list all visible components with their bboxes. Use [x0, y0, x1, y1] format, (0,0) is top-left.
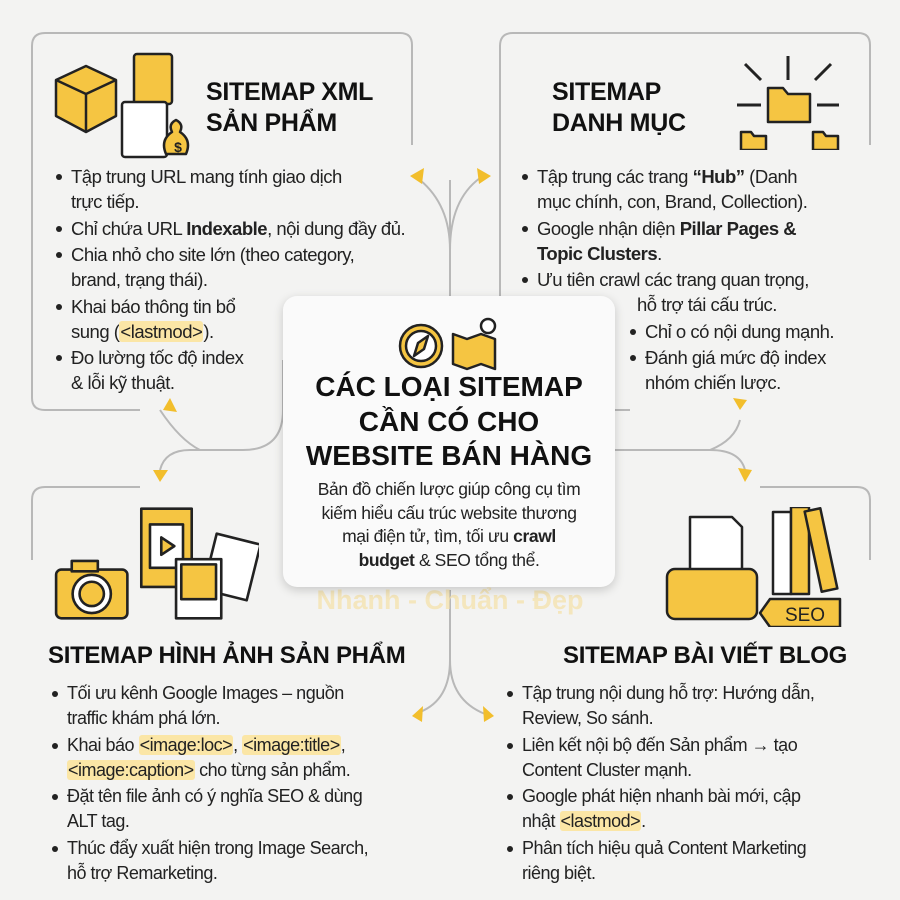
bullet list: Topic Clusters.	[537, 242, 662, 264]
panel: sitemap bai viet blog	[507, 507, 847, 883]
bullet list: hỗ trợ tái cấu trúc.	[637, 294, 777, 315]
bullet list: Google phát hiện nhanh bài mới, cập	[522, 786, 801, 806]
bullet list: Đánh giá mức độ index	[645, 347, 826, 368]
bullet list: Tối ưu kênh Google Images – nguồn	[67, 683, 344, 703]
heading	[552, 78, 686, 137]
bullet list: Ưu tiên crawl các trang quan trọng,	[537, 269, 809, 290]
main title: CÁC LOẠI SITEMAP	[315, 371, 583, 402]
panel: sitemap hinh anh san pham	[48, 507, 405, 883]
heading: DANH MỤC	[552, 109, 686, 137]
bullet list: Review, So sánh.	[522, 708, 653, 728]
panel: sitemap danh muc	[522, 56, 840, 393]
bullet list: mục chính, con, Brand, Collection).	[537, 191, 807, 212]
main title	[306, 371, 592, 471]
bullet list: traffic khám phá lớn.	[67, 708, 220, 728]
bullet list: Chỉ o có nội dung mạnh.	[645, 320, 834, 342]
heading: SITEMAP	[552, 78, 661, 106]
bullet list: Khai báo <image:loc>, <image:title>,	[67, 734, 345, 754]
bullet list: & lỗi kỹ thuật.	[71, 372, 175, 393]
bullet list	[507, 682, 814, 883]
bullet list: riêng biệt.	[522, 862, 596, 882]
subtitle: Bản đồ chiến lược giúp công cụ tìm	[318, 479, 580, 499]
bullet list: Tập trung URL mang tính giao dịch	[71, 166, 342, 187]
icon: box, sitemap docs, money bag	[54, 52, 190, 158]
subtitle: kiếm hiểu cấu trúc website thương	[321, 502, 577, 522]
icon: typewriter, books, seo tag: SEO	[785, 605, 825, 626]
bullet list: nhóm chiến lược.	[645, 372, 781, 393]
bullet list	[52, 683, 368, 883]
bullet list: Google nhận diện Pillar Pages &	[537, 218, 796, 238]
bullet list: hỗ trợ Remarketing.	[67, 862, 217, 882]
heading: SITEMAP XML	[206, 78, 373, 106]
bullet list: trực tiếp.	[71, 191, 139, 212]
bullet list: Thúc đẩy xuất hiện trong Image Search,	[67, 838, 368, 858]
icon: box, sitemap docs, money bag: $	[174, 139, 182, 155]
subtitle	[318, 479, 580, 570]
bullet list	[56, 166, 405, 393]
bullet list: Tập trung các trang “Hub” (Danh	[537, 166, 797, 187]
bullet list: ALT tag.	[67, 811, 129, 831]
bullet list: Tập trung nội dung hỗ trợ: Hướng dẫn,	[522, 683, 814, 703]
bullet list: nhật <lastmod>.	[522, 811, 646, 831]
icon: typewriter, books, seo tag	[666, 507, 842, 627]
bullet list: Khai báo thông tin bổ	[71, 296, 235, 316]
subtitle: mại điện tử, tìm, tối ưu crawl	[342, 526, 556, 546]
bullet list: <image:caption> cho từng sản phẩm.	[68, 760, 350, 780]
icon: camera, film, photos	[54, 507, 259, 620]
bullet list: Đặt tên file ảnh có ý nghĩa SEO & dùng	[67, 786, 362, 806]
heading: SITEMAP BÀI VIẾT BLOG	[563, 642, 847, 669]
icon: folder with arrows	[737, 56, 840, 150]
icon: compass and map	[398, 318, 496, 370]
bullet list	[522, 166, 834, 393]
heading: SẢN PHẨM	[206, 109, 337, 137]
bullet list: Liên kết nội bộ đến Sản phẩm → tạo	[522, 734, 797, 754]
center card	[283, 296, 615, 587]
bullet list: Content Cluster mạnh.	[522, 760, 692, 780]
bullet list: Chỉ chứa URL Indexable, nội dung đầy đủ.	[71, 218, 405, 238]
main title: CẦN CÓ CHO	[359, 406, 539, 436]
bullet list: brand, trạng thái).	[71, 269, 208, 290]
panel: sitemap xml san pham	[54, 52, 405, 393]
watermark: Nhanh - Chuẩn - Đẹp	[316, 585, 583, 615]
heading: SITEMAP HÌNH ẢNH SẢN PHẨM	[48, 642, 405, 669]
bullet list: Đo lường tốc độ index	[71, 347, 243, 368]
subtitle: budget & SEO tổng thể.	[359, 550, 539, 570]
bullet list: Chia nhỏ cho site lớn (theo category,	[71, 244, 354, 265]
heading	[206, 78, 373, 137]
bullet list: sung (<lastmod>).	[71, 320, 214, 342]
bullet list: Phân tích hiệu quả Content Marketing	[522, 838, 806, 858]
main title: WEBSITE BÁN HÀNG	[306, 440, 592, 471]
